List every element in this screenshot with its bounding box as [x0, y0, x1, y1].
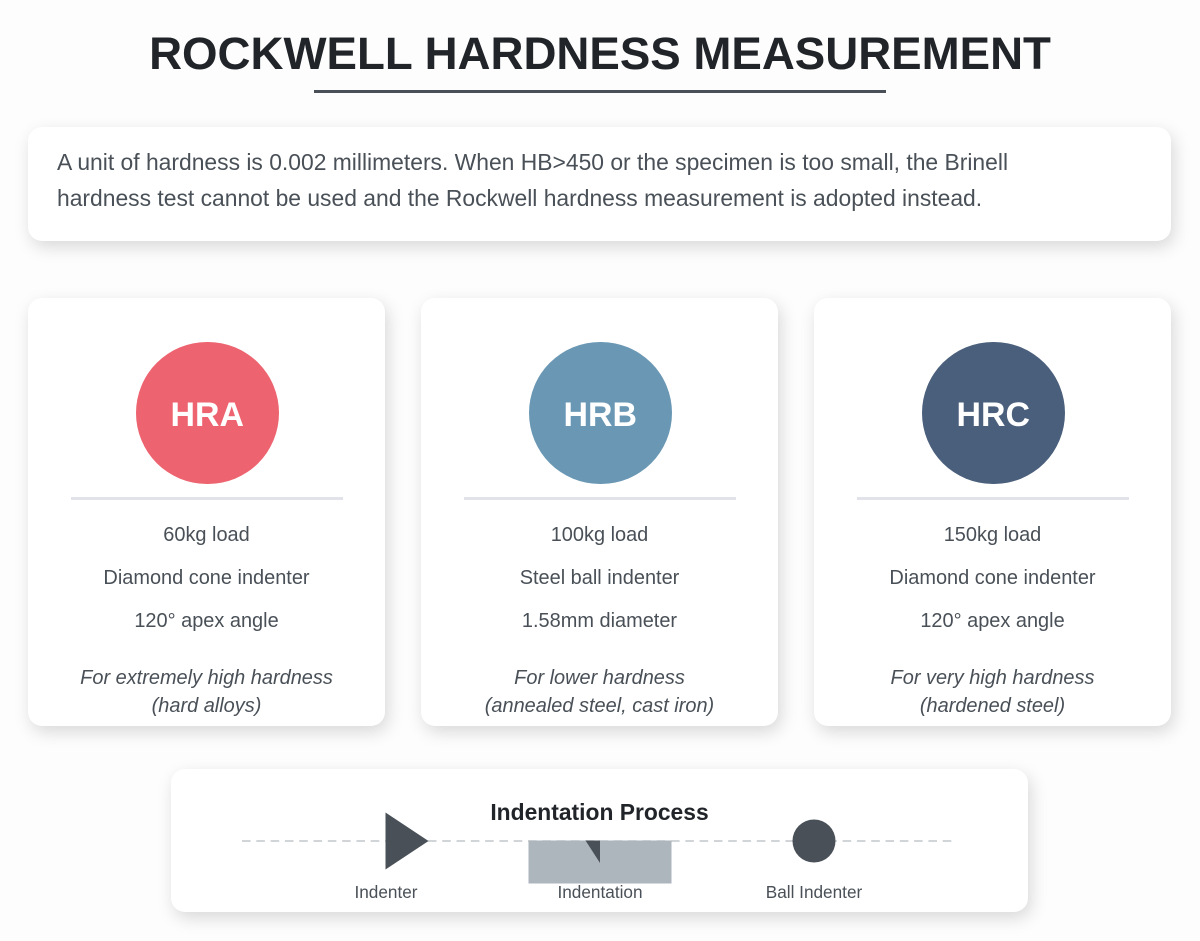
HRC usage note: (hardened steel) — [920, 695, 1065, 717]
process heading: Indentation Process — [490, 799, 709, 825]
icon: ball indenter — [792, 820, 836, 862]
indentation block — [528, 840, 672, 884]
HRA indenter: Diamond cone indenter — [103, 567, 310, 589]
HRA usage note: For extremely high hardness — [80, 667, 333, 689]
HRB indenter: Steel ball indenter — [520, 567, 679, 589]
HRC angle: 120° apex angle — [920, 610, 1065, 632]
icon: HRC circle: HRC — [957, 396, 1030, 434]
label: ball indenter: Ball Indenter — [766, 882, 862, 902]
HRC usage note — [891, 667, 1094, 717]
panel: description — [28, 127, 1171, 241]
panel: HRC — [814, 298, 1171, 726]
title underline — [314, 90, 886, 93]
icon: indentation notch — [586, 840, 600, 863]
icon: indenter triangle — [386, 812, 428, 870]
HRB usage note — [485, 667, 714, 717]
panel: indentation process — [171, 769, 1028, 912]
HRA angle: 120° apex angle — [134, 610, 279, 632]
label: indenter: Indenter — [354, 882, 418, 902]
title: ROCKWELL HARDNESS MEASUREMENT — [149, 28, 1051, 79]
HRA usage note: (hard alloys) — [152, 695, 261, 717]
HRA load: 60kg load — [163, 524, 250, 546]
icon: HRC circle — [922, 342, 1064, 484]
HRB diameter: 1.58mm diameter — [522, 610, 677, 632]
HRC usage note: For very high hardness — [891, 667, 1094, 689]
icon: HRB circle — [529, 342, 672, 484]
label: indentation: Indentation — [557, 882, 643, 902]
HRB usage note: For lower hardness — [514, 667, 685, 689]
description text: A unit of hardness is 0.002 millimeters. When HB>450 or the specimen is too small, the Brinell — [57, 149, 1008, 175]
HRB load: 100kg load — [551, 524, 648, 546]
HRC indenter: Diamond cone indenter — [889, 567, 1096, 589]
description text: hardness test cannot be used and the Rockwell hardness measurement is adopted instead. — [57, 185, 982, 211]
panel: HRB — [421, 298, 778, 726]
description text — [57, 149, 1008, 211]
icon: HRA circle — [136, 342, 278, 484]
icon: HRA circle: HRA — [171, 396, 244, 434]
panel: HRA — [28, 298, 385, 726]
icon: HRB circle: HRB — [564, 396, 637, 434]
HRB usage note: (annealed steel, cast iron) — [485, 695, 714, 717]
process diagram — [242, 812, 952, 884]
HRC load: 150kg load — [944, 524, 1041, 546]
HRA usage note — [80, 667, 333, 717]
